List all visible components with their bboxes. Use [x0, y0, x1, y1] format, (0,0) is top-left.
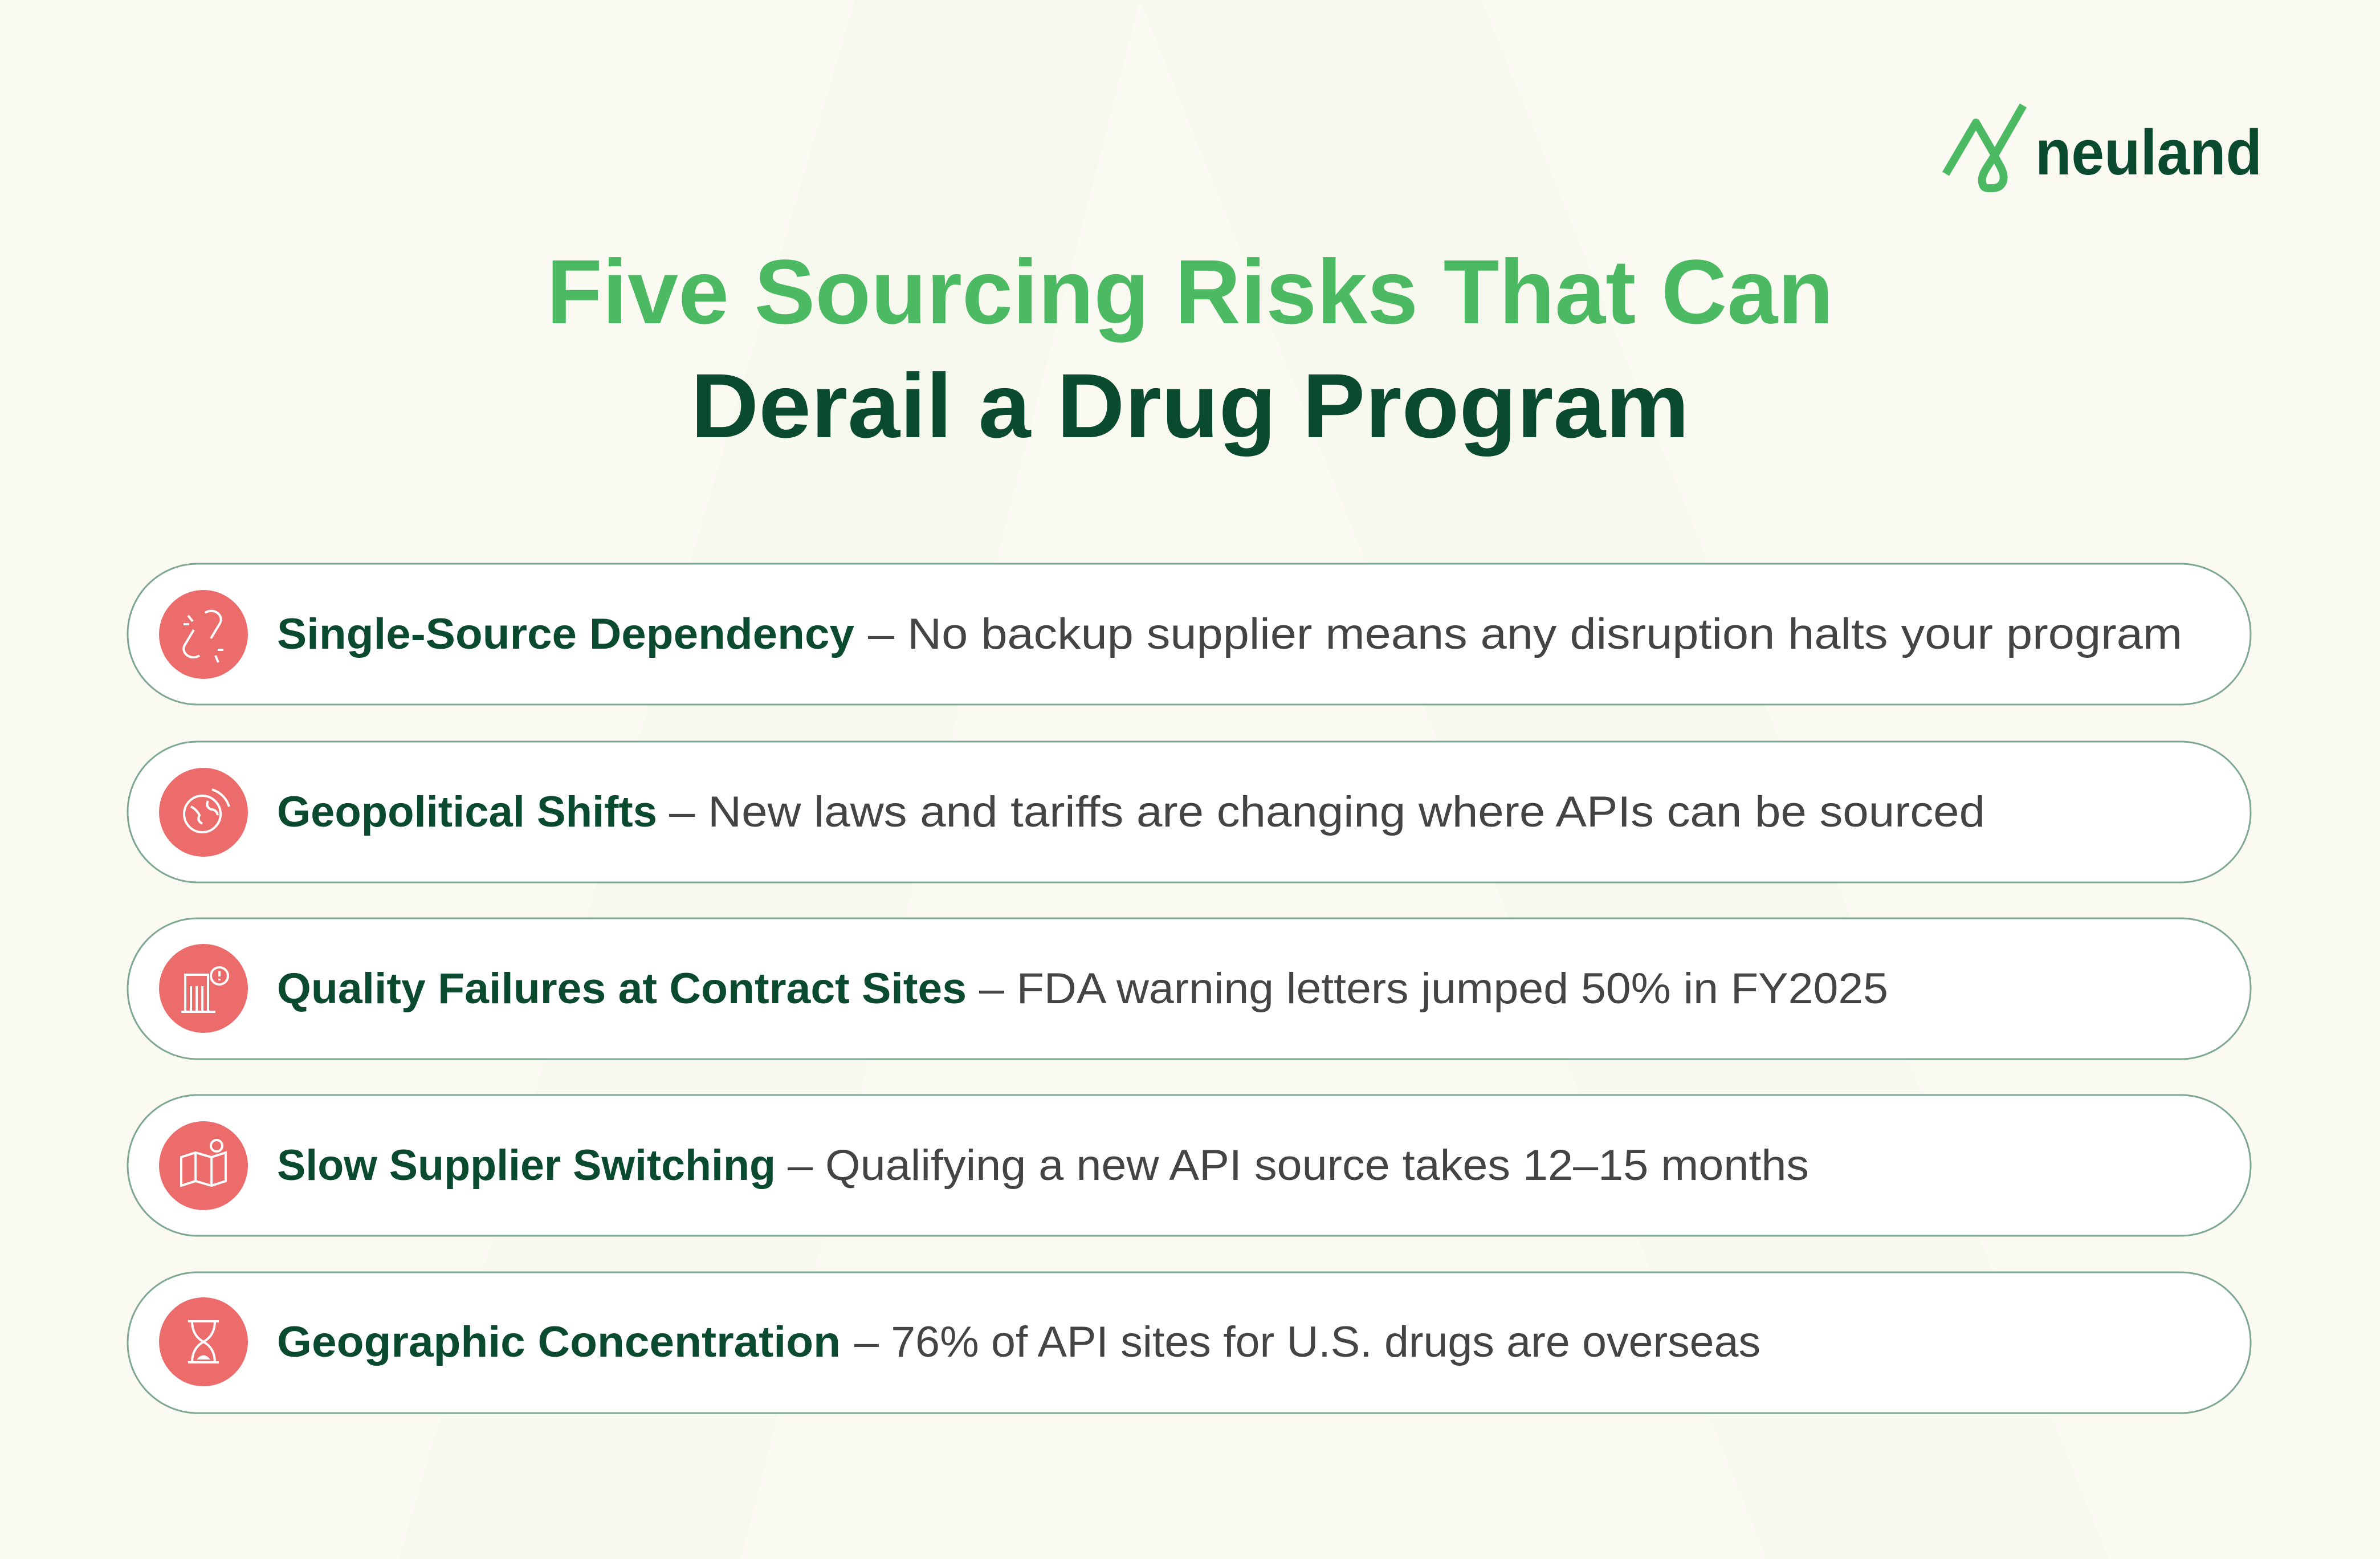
text: – New laws and tariffs are changing where APIs can be sourced	[669, 788, 1985, 836]
icon: broken link	[159, 590, 248, 679]
icon: building alert	[159, 944, 248, 1033]
icon: map pin	[159, 1121, 248, 1210]
text: Single-Source Dependency	[277, 610, 854, 658]
text: – Qualifying a new API source takes 12–15 months	[788, 1141, 1809, 1190]
text: – FDA warning letters jumped 50% in FY2025	[979, 964, 1888, 1013]
panel: slow supplier switching	[128, 1095, 2251, 1236]
text: Slow Supplier Switching	[277, 1141, 776, 1190]
icon: hourglass	[159, 1297, 248, 1386]
title: Derail a Drug Program	[691, 355, 1689, 457]
panel: single-source dependency	[128, 564, 2251, 705]
logo: neuland	[2035, 117, 2262, 188]
logo	[1946, 105, 2262, 188]
text	[277, 1318, 1760, 1366]
text: – No backup supplier means any disruption halts your program	[868, 610, 2182, 658]
title: Five Sourcing Risks That Can	[547, 241, 1833, 343]
text: Geopolitical Shifts	[277, 788, 657, 836]
text	[277, 964, 1888, 1013]
icon: globe	[159, 768, 248, 857]
text: Quality Failures at Contract Sites	[277, 964, 967, 1013]
text: Geographic Concentration	[277, 1318, 841, 1366]
title	[547, 241, 1833, 457]
panel: geopolitical shifts	[128, 742, 2251, 882]
text: – 76% of API sites for U.S. drugs are overseas	[854, 1318, 1760, 1366]
panel: quality failures	[128, 918, 2251, 1059]
text	[277, 1141, 1809, 1190]
panel: geographic concentration	[128, 1272, 2251, 1413]
text	[277, 610, 2182, 658]
